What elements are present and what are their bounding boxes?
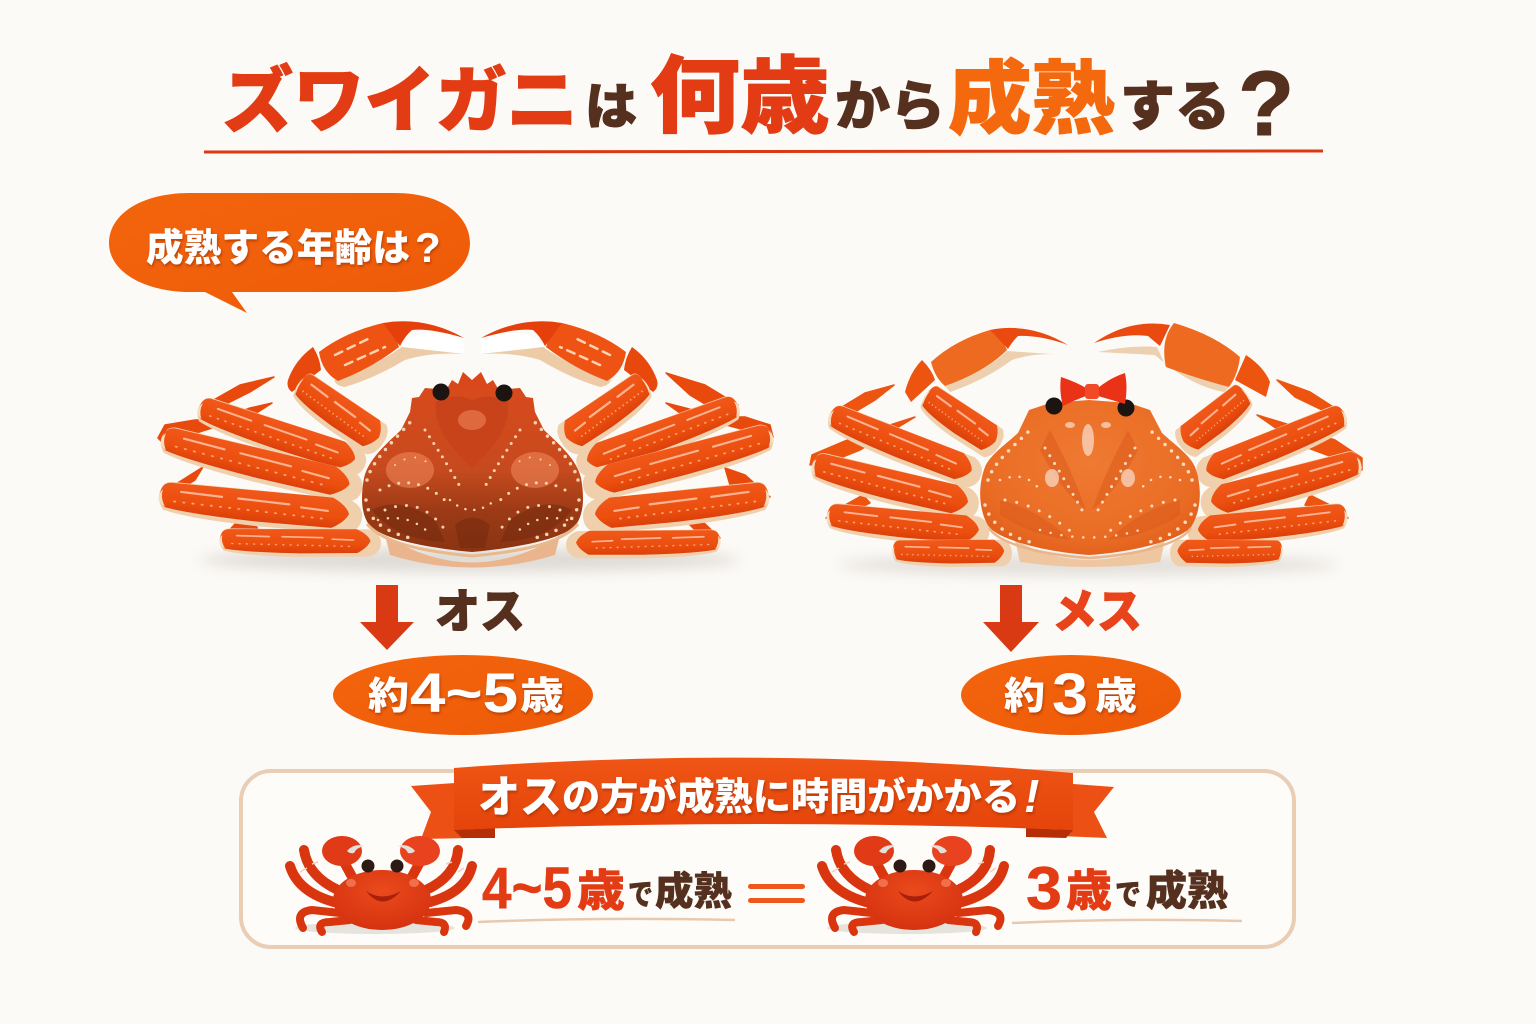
- equals sign: [748, 884, 805, 903]
- ribbon tails: [411, 782, 1114, 839]
- ribbon text: オス: [478, 773, 562, 822]
- red bow: [1060, 373, 1126, 406]
- summary panel: [241, 771, 1294, 947]
- age pill: female: [961, 655, 1181, 735]
- crab shadow: [838, 555, 1338, 575]
- text: 4-5 years: 4~5: [482, 856, 572, 921]
- underline: male: [478, 919, 735, 922]
- age pill: male: 4~5: [410, 661, 518, 724]
- age pill: male: 歳: [520, 676, 564, 718]
- right claw: [1094, 323, 1270, 461]
- shell folds: [1000, 430, 1180, 540]
- walking legs: [156, 393, 778, 559]
- text: 4-5 years: [482, 856, 732, 921]
- label: male: オス: [435, 585, 525, 638]
- arrow: male: [360, 585, 414, 650]
- title: ?: [1238, 53, 1294, 155]
- carapace rim: [989, 528, 1191, 558]
- underside: [385, 535, 560, 568]
- age pill: female: 3: [1052, 662, 1088, 727]
- eyes: [432, 384, 512, 402]
- ribbon text: [478, 770, 1039, 822]
- female snow crab: [807, 323, 1366, 575]
- ribbon banner: [411, 758, 1114, 839]
- title: から: [835, 77, 945, 137]
- age pill: female: 約: [1004, 676, 1045, 718]
- walking leg tips: [810, 380, 1362, 518]
- speech bubble: question: 成熟する年齢は: [146, 227, 410, 270]
- title: は: [585, 79, 637, 135]
- carapace: [980, 400, 1200, 555]
- eyes: [1046, 398, 1134, 416]
- text: 4-5 years: 歳: [577, 867, 625, 916]
- arrow: female: [983, 585, 1039, 652]
- speech bubble: question: [109, 193, 470, 313]
- walking legs: [807, 402, 1366, 567]
- title: する: [1120, 77, 1230, 137]
- ribbon band: [454, 758, 1073, 830]
- underside: [1015, 540, 1165, 567]
- carapace rim: [367, 524, 578, 556]
- shell highlights: [386, 410, 559, 488]
- male snow crab: [156, 321, 778, 572]
- text: 3 years: 成熟: [1146, 868, 1228, 914]
- small crab: male: [290, 836, 472, 934]
- shell gloss: [1045, 422, 1135, 487]
- shell bumps: [366, 420, 579, 538]
- heart bump: [436, 396, 508, 468]
- shell bumps: [985, 430, 1195, 542]
- text: 4-5 years: 成熟: [655, 870, 732, 914]
- age pill: male: 約: [368, 676, 409, 718]
- text: 4-5 years: で: [628, 879, 653, 912]
- small crab: female: [822, 836, 1004, 934]
- title: ズワイガニ: [222, 62, 578, 142]
- title: [222, 50, 1294, 155]
- age pill: male: [333, 655, 593, 735]
- left claw: [905, 328, 1068, 462]
- shell dark lobes: [372, 504, 572, 548]
- text: 3 years: で: [1115, 879, 1141, 912]
- claws: [287, 321, 658, 459]
- title underline: [204, 151, 1323, 152]
- text: 3 years: 3: [1026, 855, 1062, 922]
- rostrum: [445, 372, 500, 392]
- walking leg tips: [158, 373, 773, 538]
- age pill: female: 歳: [1095, 676, 1137, 718]
- speech bubble: question: ?: [415, 224, 441, 271]
- title: 何歳: [650, 50, 830, 144]
- underline: female: [1012, 920, 1242, 923]
- label: female: メス: [1052, 585, 1142, 638]
- title: 成熟: [948, 55, 1115, 144]
- ribbon text: の方が成熟に時間がかかる: [562, 776, 1020, 819]
- ribbon text: !: [1024, 770, 1039, 822]
- text: 3 years: 歳: [1066, 867, 1112, 916]
- carapace: [362, 388, 583, 552]
- crab shadow: [200, 548, 740, 572]
- text: 3 years: [1026, 855, 1228, 922]
